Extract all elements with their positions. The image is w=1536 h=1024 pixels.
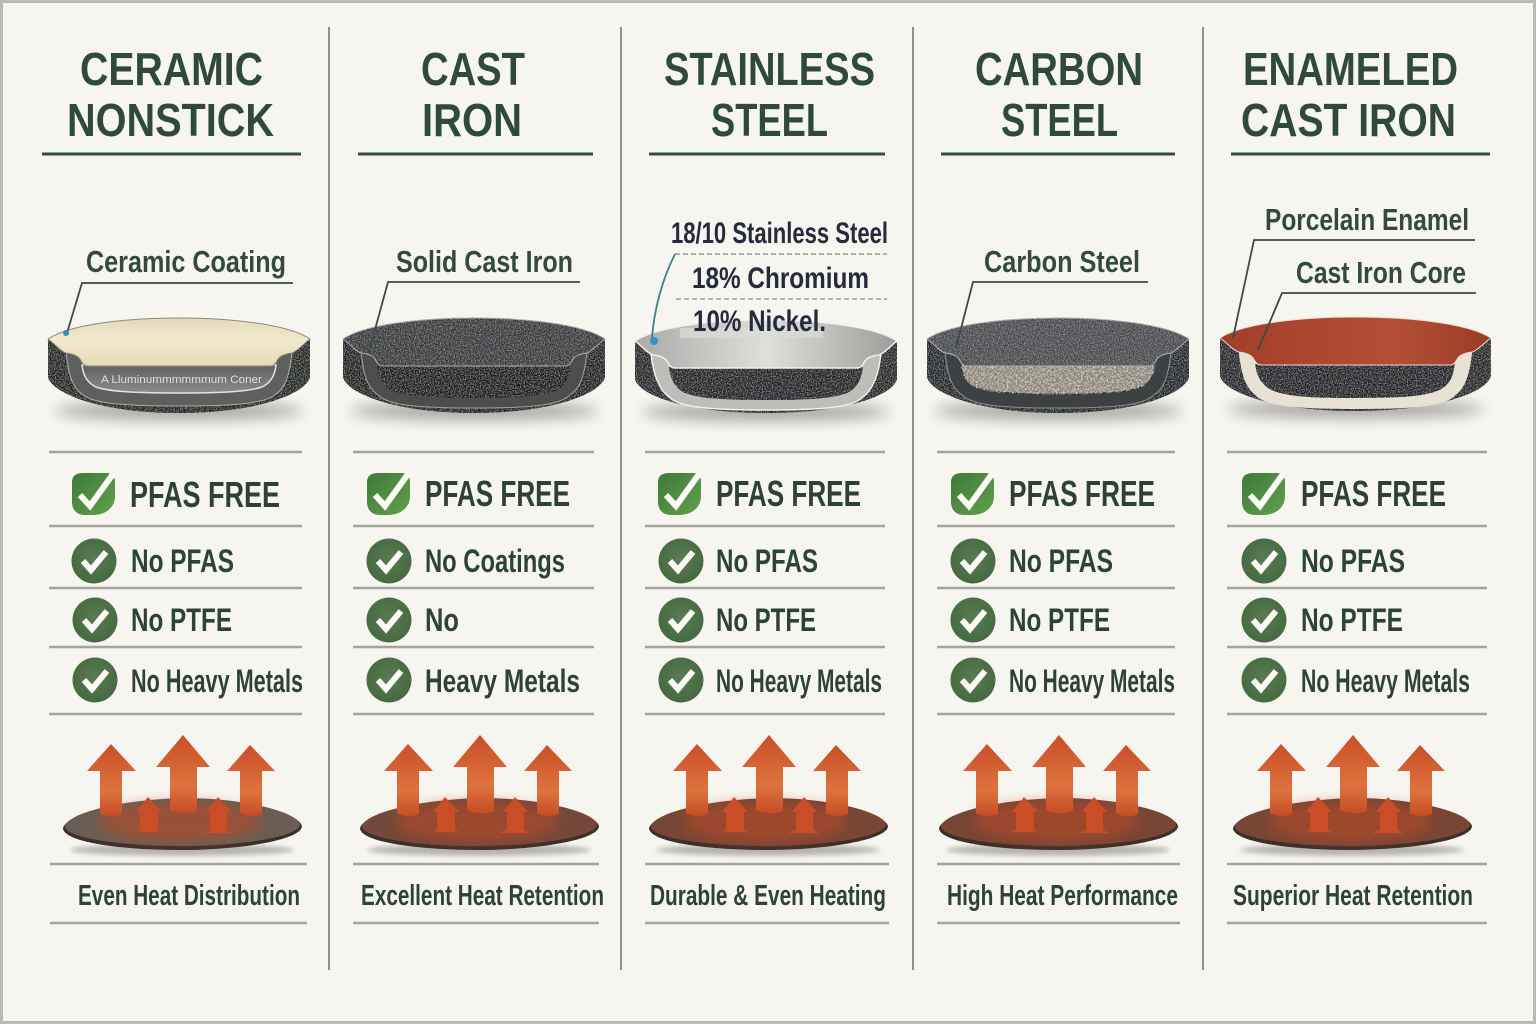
text: no PFAS: No PFAS (1009, 543, 1113, 579)
heading: carbon steel (941, 43, 1175, 154)
icon: PFAS free badge (1242, 473, 1285, 515)
heading: ceramic nonstick: CERAMIC (80, 43, 263, 95)
callout: ceramic coating: Ceramic Coating (86, 244, 286, 279)
callout: ceramic coating (63, 244, 293, 336)
text: no coatings: No Coatings (425, 543, 565, 579)
heading: carbon steel: CARBON (975, 43, 1143, 95)
callout: carbon steel (956, 244, 1148, 348)
icon: heat arrows, ceramic (63, 735, 302, 856)
text: PFAS free: PFAS FREE (716, 473, 861, 514)
text: no heavy metals: No Heavy Metals (131, 663, 303, 699)
icon: check (366, 538, 412, 584)
pan cross-section: cast iron (343, 318, 605, 420)
icon: check (72, 598, 118, 642)
text: no PTFE: No PTFE (131, 602, 232, 638)
feature list: enameled cast iron (1227, 452, 1487, 714)
icon: check (72, 538, 116, 584)
heading: enameled cast iron (1231, 43, 1490, 154)
icon: PFAS free badge (658, 473, 701, 515)
icon: check (72, 658, 118, 702)
callout: cast iron core: Cast Iron Core (1296, 255, 1466, 290)
label inside pan: A Lluminummmmmmum Coner (101, 374, 262, 386)
heading: cast iron: IRON (422, 94, 522, 146)
feature list: ceramic nonstick (49, 452, 303, 714)
callout: solid cast iron: Solid Cast Iron (396, 244, 573, 279)
pan cross-section: stainless (635, 320, 897, 421)
icon: heat arrows, stainless (649, 735, 888, 856)
callout: porcelain enamel (1233, 202, 1475, 338)
icon: PFAS free badge (951, 473, 994, 515)
icon: check (950, 658, 996, 702)
pan cross-section: ceramic (48, 318, 310, 420)
heading: ceramic nonstick: NONSTICK (67, 94, 274, 146)
caption: ceramic: Even Heat Distribution (78, 880, 300, 912)
callout: stainless composition: 18% Chromium (692, 262, 869, 295)
feature list: carbon steel (937, 452, 1175, 714)
icon: check (950, 538, 996, 584)
heading: enameled cast iron: CAST IRON (1241, 94, 1456, 146)
text: no heavy metals: No Heavy Metals (1009, 663, 1175, 699)
panel: cast iron (343, 43, 605, 420)
icon: check (658, 598, 704, 642)
icon: check (658, 538, 704, 584)
pan cross-section: carbon steel (927, 318, 1189, 420)
caption: carbon steel: High Heat Performance (947, 880, 1178, 912)
caption: cast iron: Excellent Heat Retention (361, 880, 604, 912)
panel: stainless steel (635, 43, 897, 421)
heading: cast iron (358, 43, 593, 154)
callout: solid cast iron (370, 244, 580, 348)
text: heavy metals: Heavy Metals (425, 663, 580, 699)
icon: check (366, 598, 412, 642)
heading: enameled cast iron: ENAMELED (1243, 43, 1458, 95)
icon: heat arrows, carbon steel (939, 735, 1178, 856)
text: no PFAS: No PFAS (1301, 543, 1405, 579)
text: PFAS free: PFAS FREE (130, 474, 280, 515)
heading: stainless steel (649, 43, 885, 154)
column dividers (329, 27, 1203, 970)
icon: check (658, 658, 704, 702)
icon: PFAS free badge (72, 473, 115, 515)
text: PFAS free: PFAS FREE (1009, 473, 1155, 514)
text: no heavy metals: No Heavy Metals (716, 663, 882, 699)
heading: cast iron: CAST (421, 43, 525, 95)
callout: stainless composition: 18/10 Stainless Steel (671, 217, 888, 250)
callout: carbon steel: Carbon Steel (984, 244, 1140, 279)
icon: heat arrows, enameled (1233, 735, 1472, 856)
icon: PFAS free badge (367, 473, 410, 515)
icon: check (950, 598, 996, 642)
heading: ceramic nonstick (42, 43, 301, 154)
icon: heat arrows, cast iron (360, 735, 599, 856)
feature list: cast iron (353, 452, 594, 714)
panel: carbon steel (927, 43, 1189, 420)
text: no PTFE: No PTFE (1301, 602, 1403, 638)
icon: check (1242, 598, 1286, 642)
heading: stainless steel: STEEL (711, 94, 828, 146)
pan cross-section: enameled (1220, 317, 1491, 418)
icon: check (1242, 658, 1286, 702)
heading: stainless steel: STAINLESS (664, 43, 875, 95)
icon: check (366, 658, 412, 702)
callout: stainless composition (650, 217, 888, 345)
callout: stainless composition: 10% Nickel. (693, 305, 826, 338)
panel: ceramic nonstick (42, 43, 310, 420)
feature list: stainless steel (645, 452, 885, 714)
text: PFAS free: PFAS FREE (1301, 473, 1446, 514)
callout: cast iron core (1258, 255, 1476, 350)
heat captions (50, 864, 1487, 923)
text: no PTFE: No PTFE (716, 602, 816, 638)
callout: porcelain enamel: Porcelain Enamel (1265, 202, 1469, 237)
text: no PFAS: No PFAS (131, 543, 234, 579)
text: no: No (425, 602, 459, 638)
text: no PFAS: No PFAS (716, 543, 818, 579)
panel: enameled cast iron (1220, 43, 1491, 418)
text: PFAS free: PFAS FREE (425, 473, 570, 514)
icon: check (1242, 538, 1286, 584)
text: no PTFE: No PTFE (1009, 602, 1110, 638)
caption: stainless: Durable & Even Heating (650, 880, 886, 912)
heading: carbon steel: STEEL (1001, 94, 1118, 146)
